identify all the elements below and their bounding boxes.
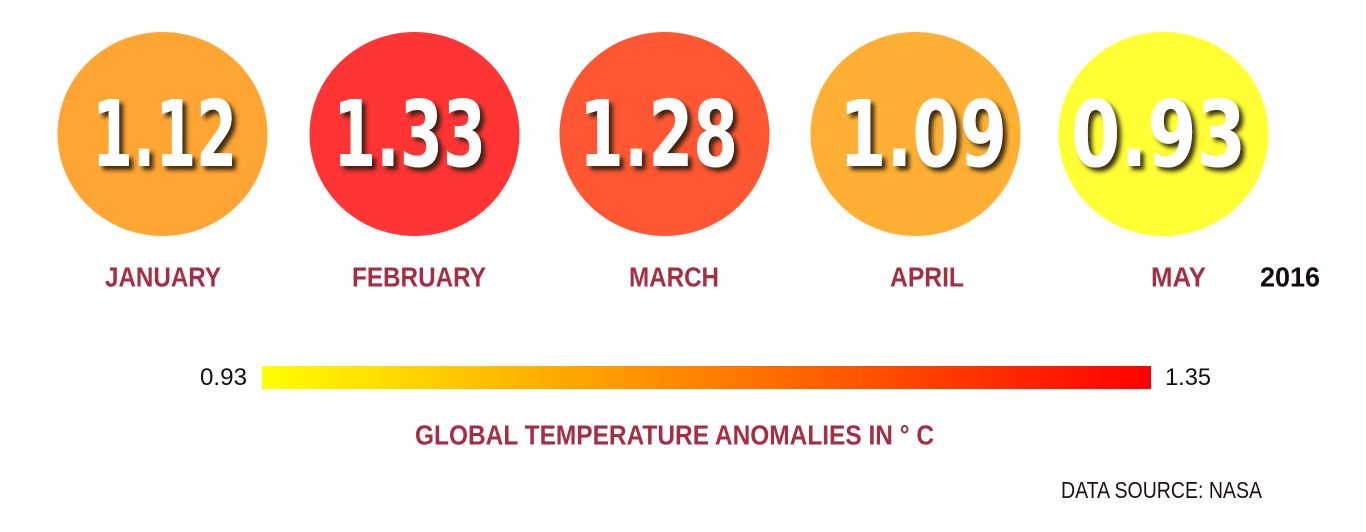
panel: January xyxy=(58,32,268,292)
value: April: 1.09 xyxy=(839,81,1007,188)
legend maximum value: 1.35 xyxy=(1165,364,1211,391)
year label: 2016 xyxy=(1260,262,1320,292)
label: April: APRIL xyxy=(890,262,964,292)
value: January: 1.12 xyxy=(92,81,237,188)
circle: March value xyxy=(560,32,770,236)
legend gradient bar xyxy=(262,366,1151,389)
value: May: 0.93 xyxy=(1071,81,1246,188)
legend: colour scale xyxy=(200,364,1211,391)
label: January: JANUARY xyxy=(105,262,221,292)
panel: February xyxy=(310,32,520,292)
label: February: FEBRUARY xyxy=(352,262,486,292)
legend minimum value: 0.93 xyxy=(200,364,247,391)
circle: February value xyxy=(310,32,520,236)
panel: March xyxy=(560,32,770,292)
value: March: 1.28 xyxy=(579,81,738,188)
circle: January value xyxy=(58,32,268,236)
data source: DATA SOURCE: NASA xyxy=(1061,477,1263,503)
circle: April value xyxy=(810,32,1020,236)
panel: May xyxy=(1058,32,1268,292)
panel: April xyxy=(810,32,1020,292)
label: May: MAY xyxy=(1151,262,1206,292)
label: March: MARCH xyxy=(629,262,719,292)
circle: May value xyxy=(1058,32,1268,236)
value: February: 1.33 xyxy=(333,81,486,188)
legend title: GLOBAL TEMPERATURE ANOMALIES IN ° C xyxy=(415,420,934,450)
